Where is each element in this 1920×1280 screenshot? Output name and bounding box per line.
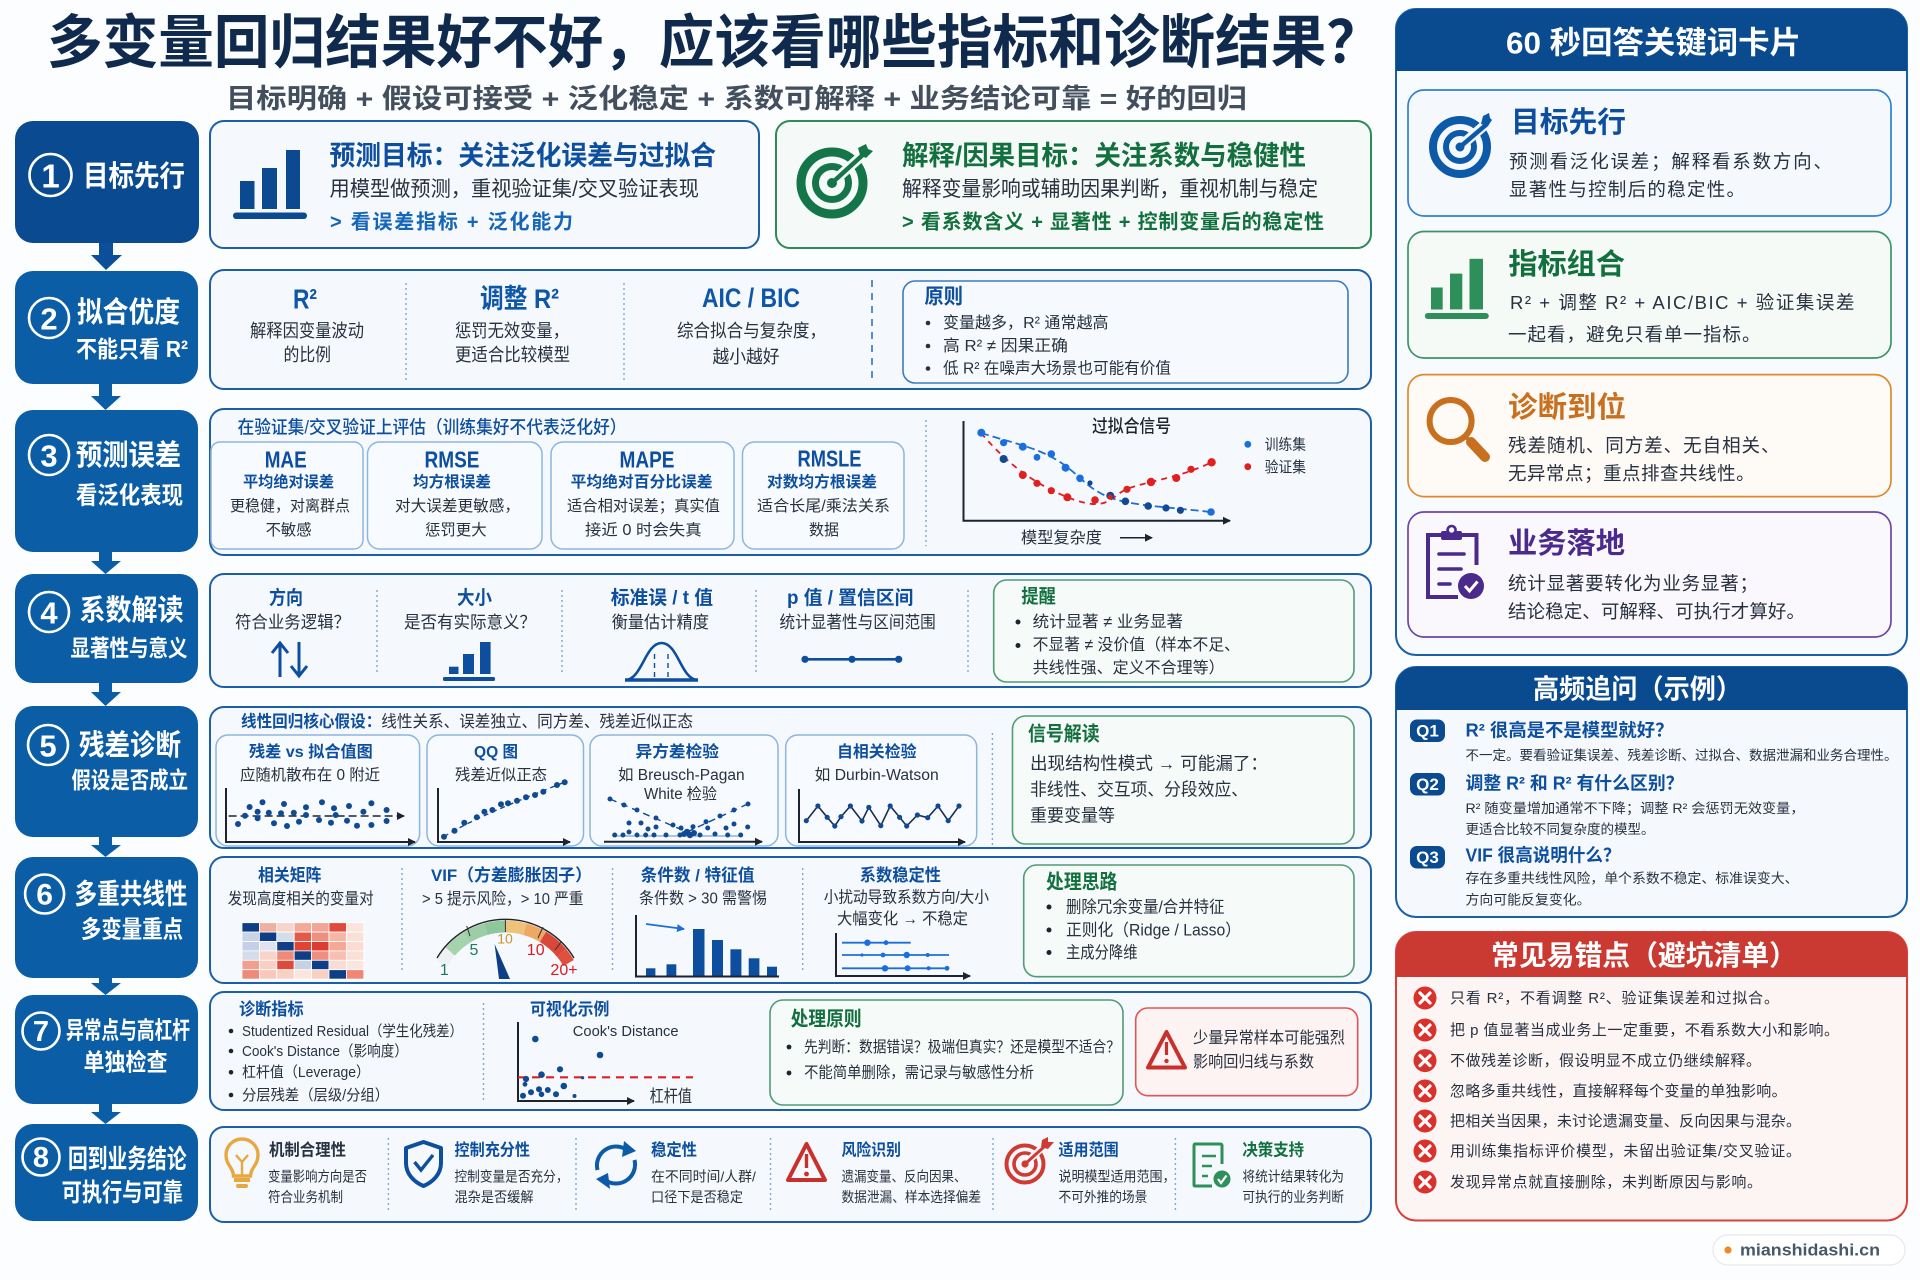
mistake 3: 不做残差诊断，假设明显不成立仍继续解释。 <box>1450 1052 1761 1070</box>
subtitle: 目标明确 + 假设可接受 + 泛化稳定 + 系数可解释 + 业务结论可靠 = 好的回归 <box>226 84 1247 114</box>
question 3 <box>1410 844 1798 908</box>
step 7 nav box: 7 <box>33 1016 49 1048</box>
chart: cook's distance <box>518 999 693 1106</box>
watermark: site name <box>1713 1235 1905 1265</box>
item: decision support: 将统计结果转化为 <box>1242 1168 1344 1184</box>
item: risk identification: 风险识别 <box>842 1140 901 1160</box>
item: direction: 方向 <box>269 586 303 609</box>
step 5 nav box: 残差诊断 <box>79 729 181 762</box>
chart: overfitting signal: 模型复杂度 <box>1021 529 1102 547</box>
panel header: 60 秒回答关键词卡片 <box>1506 26 1801 60</box>
mistake 2: 把 p 值显著当成业务上一定重要，不看系数大小和影响。 <box>1450 1022 1839 1039</box>
step 2 nav box: 2 <box>40 302 58 336</box>
panel header: 常见易错点（避坑清单） <box>1491 940 1797 971</box>
text: diagnostics <box>1508 391 1780 484</box>
card: autocorrelation test <box>786 735 977 846</box>
item: mechanism plausibility <box>226 1139 367 1205</box>
prediction goal text: 用模型做预测，重视验证集/交叉验证表现 <box>330 178 699 201</box>
item: mechanism plausibility: 符合业务机制 <box>268 1189 343 1205</box>
chart: overfitting signal: 过拟合信号 <box>1092 416 1171 436</box>
item: risk identification: 数据泄漏、样本选择偏差 <box>842 1189 981 1205</box>
card: MAE: 平均绝对误差 <box>243 472 334 491</box>
mistake 7: 发现异常点就直接删除，未判断原因与影响。 <box>1450 1174 1762 1191</box>
callout: reminder: 提醒 <box>1021 586 1056 608</box>
card: QQ plot: QQ 图 <box>474 744 518 761</box>
item: mechanism plausibility: 变量影响方向是否 <box>268 1168 367 1184</box>
mistake 5 <box>1414 1110 1801 1132</box>
item: applicability: 不可外推的场景 <box>1058 1189 1147 1205</box>
explanation goal text: 解释/因果目标：关注系数与稳健性 <box>902 141 1306 171</box>
item: standard error: 衡量估计精度 <box>612 613 709 632</box>
question 3: 存在多重共线性风险，单个系数不稳定、标准误变大、 <box>1466 870 1798 886</box>
question 2 <box>1410 773 1804 837</box>
metric: adjusted R squared: 调整 R² <box>480 284 559 314</box>
text: business landing: 结论稳定、可解释、可执行才算好。 <box>1508 601 1805 622</box>
callout: principles: 低 R² 在噪声大场景也可能有价值 <box>943 360 1171 378</box>
chart: overfitting signal: 训练集 <box>1265 436 1306 454</box>
mistake 3 <box>1414 1049 1761 1072</box>
callout: remedies: 主成分降维 <box>1066 943 1138 962</box>
step 7 nav box <box>15 995 198 1104</box>
step 3 nav box <box>15 410 198 552</box>
card: heteroscedasticity test: 如 Breusch-Pagan <box>618 766 745 784</box>
item: decision support: 可执行的业务判断 <box>1242 1189 1344 1205</box>
step 8 nav box <box>15 1124 198 1221</box>
chart: cook's distance: 杠杆值 <box>650 1087 692 1106</box>
chart: overfitting signal <box>964 416 1306 547</box>
panel: goodness of fit <box>210 270 1371 389</box>
explanation goal text: 解释变量影响或辅助因果判断，重视机制与稳定 <box>902 178 1318 201</box>
card: business landing <box>1408 512 1891 637</box>
card: RMSLE: 数据 <box>809 521 839 539</box>
arrow step 5 to 6 <box>91 837 121 857</box>
item: applicability: 适用范围 <box>1058 1140 1119 1160</box>
panel: residual diagnostics <box>210 707 1371 848</box>
card: metric combination <box>1408 232 1891 358</box>
list: diagnostic indicators: 杠杆值（Leverage） <box>242 1064 370 1081</box>
step 6 nav box: 6 <box>36 878 53 912</box>
callout: signal interpretation: 重要变量等 <box>1030 806 1115 826</box>
step 4 nav box: 4 <box>40 596 58 630</box>
item: control adequacy: 控制充分性 <box>454 1140 530 1160</box>
callout: remedies: 删除冗余变量/合并特征 <box>1066 898 1224 916</box>
step 4 nav box: 系数解读 <box>80 594 184 627</box>
panel: outliers and leverage <box>210 992 1371 1110</box>
step 1 nav box <box>15 121 199 243</box>
watermark: site name: mianshidashi.cn <box>1740 1240 1880 1260</box>
text: metric combination <box>1508 248 1854 345</box>
card: RMSE: 惩罚更大 <box>425 521 487 539</box>
callout: reminder <box>994 580 1354 682</box>
panel: follow-up questions <box>1396 667 1907 917</box>
panel: prediction goal <box>210 121 759 248</box>
callout: principles: 高 R² ≠ 因果正确 <box>943 337 1068 355</box>
arrow step 1 to 2 <box>91 243 122 270</box>
arrow step 7 to 8 <box>91 1104 121 1124</box>
explanation goal text <box>902 141 1324 234</box>
card: RMSLE <box>742 442 904 549</box>
step 2 nav box: 不能只看 R² <box>76 336 188 362</box>
callout: handling principles <box>770 1000 1123 1105</box>
icon: warning triangle <box>1148 1032 1185 1068</box>
step 7 nav box: 单独检查 <box>84 1048 168 1076</box>
arrow step 4 to 5 <box>91 683 121 706</box>
callout: signal interpretation: 非线性、交互项、分段效应、 <box>1030 780 1248 800</box>
panel: prediction error <box>210 409 1371 555</box>
panel header <box>1396 667 1907 710</box>
card: RMSE: RMSE <box>424 446 480 472</box>
item: direction: 符合业务逻辑？ <box>235 613 350 632</box>
item: VIF gauge: > 5 提示风险，> 10 严重 <box>422 890 584 908</box>
step 2 nav box: 拟合优度 <box>77 296 180 329</box>
question 1: 不一定。要看验证集误差、残差诊断、过拟合、数据泄漏和业务合理性。 <box>1466 748 1898 763</box>
item: standard error <box>611 587 713 680</box>
panel: explanation goal <box>776 121 1371 248</box>
callout: signal interpretation <box>1012 716 1354 844</box>
item: stability: 口径下是否稳定 <box>651 1189 743 1205</box>
item: VIF gauge: 10 <box>497 930 513 946</box>
step 1 nav box: 目标先行 <box>83 160 185 193</box>
question 2: 调整 R² 和 R² 有什么区别？ <box>1466 774 1684 794</box>
text: diagnostics: 诊断到位 <box>1508 391 1626 424</box>
arrow step 2 to 3 <box>91 384 121 410</box>
assumptions header: 线性回归核心假设：线性关系、误差独立、同方差、残差近似正态 <box>241 711 693 731</box>
item: VIF gauge <box>422 865 592 979</box>
arrow step 6 to 7 <box>91 978 121 995</box>
text: goal first: 目标先行 <box>1511 106 1626 139</box>
mistake 4: 忽略多重共线性，直接解释每个变量的单独影响。 <box>1450 1083 1787 1100</box>
warning text <box>1193 1029 1345 1071</box>
item: correlation matrix: 发现高度相关的变量对 <box>228 890 374 908</box>
prediction goal text <box>330 141 716 234</box>
text: goal first <box>1509 106 1832 200</box>
card: MAPE: 平均绝对百分比误差 <box>571 472 713 491</box>
card: QQ plot <box>427 735 584 846</box>
callout: handling principles: 不能简单删除，需记录与敏感性分析 <box>804 1064 1034 1082</box>
item: stability: 稳定性 <box>651 1140 697 1160</box>
mistake 6 <box>1414 1140 1801 1162</box>
warning text: 影响回归线与系数 <box>1193 1053 1314 1071</box>
prediction goal text: > 看误差指标 + 泛化能力 <box>330 210 573 234</box>
item: stability: 在不同时间/人群/ <box>651 1168 756 1184</box>
text: business landing <box>1508 527 1805 622</box>
item: coefficient stability: 大幅变化 → 不稳定 <box>837 910 968 928</box>
card: heteroscedasticity test: 异方差检验 <box>636 742 719 761</box>
card: RMSE <box>368 442 542 549</box>
item: risk identification: 遗漏变量、反向因果、 <box>842 1168 966 1184</box>
item: stability <box>596 1140 756 1205</box>
chart: cook's distance: Cook's Distance <box>573 1023 679 1040</box>
icon: bar chart <box>233 150 307 219</box>
card: MAE: 更稳健，对离群点 <box>230 497 350 515</box>
callout: signal interpretation: 出现结构性模式 → 可能漏了： <box>1030 754 1268 774</box>
step 6 nav box <box>15 857 198 978</box>
item: condition number chart <box>636 865 779 976</box>
metric: AIC BIC: AIC / BIC <box>702 283 800 313</box>
list: diagnostic indicators: 诊断指标 <box>239 999 304 1019</box>
callout: warning <box>1136 1008 1358 1096</box>
step 3 nav box: 预测误差 <box>76 439 181 472</box>
card: heteroscedasticity test: White 检验 <box>644 785 717 803</box>
step 4 nav box: 显著性与意义 <box>70 635 188 661</box>
item: correlation matrix: 相关矩阵 <box>258 866 321 885</box>
step 6 nav box: 多重共线性 <box>74 878 188 910</box>
step 8 nav box: 可执行与可靠 <box>62 1179 183 1207</box>
icon: green bars <box>1425 259 1489 319</box>
chart: cook's distance: 可视化示例 <box>530 999 609 1019</box>
callout: handling principles: 处理原则 <box>791 1008 862 1030</box>
callout: remedies: 处理思路 <box>1046 870 1117 894</box>
metric: R squared: 的比例 <box>284 345 331 365</box>
icon: clipboard <box>1428 526 1484 599</box>
item: risk identification <box>788 1140 981 1205</box>
explanation goal text: > 看系数含义 + 显著性 + 控制变量后的稳定性 <box>902 210 1324 234</box>
callout: reminder: 统计显著 ≠ 业务显著 <box>1033 613 1183 631</box>
card: autocorrelation test: 自相关检验 <box>837 742 916 761</box>
item: direction <box>235 586 350 677</box>
callout: remedies <box>1024 865 1354 977</box>
mistake 1 <box>1414 986 1779 1010</box>
card: heteroscedasticity test <box>590 735 778 846</box>
question 2: 更适合比较不同复杂度的模型。 <box>1466 821 1654 837</box>
arrow step 3 to 4 <box>91 552 121 574</box>
item: VIF gauge: 1 <box>440 962 449 979</box>
warning text: 少量异常样本可能强烈 <box>1193 1029 1345 1047</box>
metric: adjusted R squared <box>455 284 570 365</box>
text: business landing: 业务落地 <box>1508 527 1625 560</box>
panel header: 高频追问（示例） <box>1533 674 1742 704</box>
item: magnitude: 大小 <box>457 587 492 609</box>
item: control adequacy <box>406 1140 568 1205</box>
item: condition number chart: 条件数 > 30 需警惕 <box>639 890 767 908</box>
panel header <box>1396 932 1907 977</box>
item: applicability <box>1006 1137 1176 1205</box>
panel: 60 second keyword cards <box>1396 9 1907 655</box>
text: metric combination: R² + 调整 R² + AIC/BIC + 验证集误差 <box>1510 292 1854 313</box>
callout: signal interpretation: 信号解读 <box>1028 722 1100 746</box>
mistake 4 <box>1414 1080 1787 1102</box>
callout: principles: 原则 <box>924 286 963 308</box>
step 3 nav box: 看泛化表现 <box>76 482 183 510</box>
card: MAE: 不敏感 <box>266 521 312 539</box>
question 3: 方向可能反复变化。 <box>1466 892 1590 908</box>
item: magnitude: 是否有实际意义？ <box>404 613 536 632</box>
metric: R squared: 解释因变量波动 <box>250 321 364 341</box>
step 4 nav box <box>15 574 198 683</box>
card: MAPE <box>551 442 734 549</box>
title: 多变量回归结果好不好，应该看哪些指标和诊断结果？ <box>47 10 1382 76</box>
text: diagnostics: 残差随机、同方差、无自相关、 <box>1508 435 1780 456</box>
text: goal first: 预测看泛化误差；解释看系数方向、 <box>1509 151 1832 172</box>
card: MAPE: 接近 0 时会失真 <box>585 521 702 539</box>
callout: remedies: 正则化（Ridge / Lasso） <box>1066 920 1241 940</box>
item: VIF gauge: 10 <box>527 942 545 959</box>
metric: AIC BIC: 综合拟合与复杂度， <box>677 321 826 341</box>
card: RMSLE: RMSLE <box>798 446 862 472</box>
card: RMSLE: 适合长尾/乘法关系 <box>757 497 890 515</box>
text: goal first: 显著性与控制后的稳定性。 <box>1509 179 1745 200</box>
panel: coefficient interpretation <box>210 574 1371 687</box>
metric: AIC BIC <box>677 283 826 367</box>
question 2: Q2 <box>1416 775 1439 794</box>
icon: magnifier <box>1430 400 1485 457</box>
text: business landing: 统计显著要转化为业务显著； <box>1508 573 1758 594</box>
card: diagnostics <box>1408 375 1891 497</box>
list: diagnostic indicators: Cook's Distance（影响度） <box>242 1043 408 1060</box>
card: QQ plot: 残差近似正态 <box>455 766 547 784</box>
item: p value: p 值 / 置信区间 <box>787 587 913 609</box>
text: metric combination: 一起看，避免只看单一指标。 <box>1508 324 1760 345</box>
item: control adequacy: 混杂是否缓解 <box>454 1189 534 1205</box>
item: magnitude <box>404 587 536 681</box>
item: control adequacy: 控制变量是否充分， <box>454 1168 568 1184</box>
mistake 1: 只看 R²，不看调整 R²、验证集误差和过拟合。 <box>1450 990 1779 1007</box>
question 3: VIF 很高说明什么？ <box>1466 844 1620 866</box>
item: decision support: 决策支持 <box>1242 1140 1304 1160</box>
card: RMSE: 对大误差更敏感， <box>395 497 520 515</box>
mistake 5: 把相关当因果，未讨论遗漏变量、反向因果与混杂。 <box>1450 1113 1801 1130</box>
prediction goal text: 预测目标：关注泛化误差与过拟合 <box>330 141 716 171</box>
card: goal first <box>1408 90 1891 216</box>
panel: multicollinearity <box>210 857 1371 983</box>
card: MAE: MAE <box>265 446 307 472</box>
mistake 2 <box>1414 1018 1839 1042</box>
step 3 nav box: 3 <box>40 438 58 474</box>
list: diagnostic indicators: 分层残差（层级/分组） <box>242 1087 389 1104</box>
metric: R squared: R² <box>293 284 317 314</box>
card: residual vs fitted <box>216 735 420 846</box>
item: VIF gauge: 20+ <box>550 962 578 979</box>
metric: AIC BIC: 越小越好 <box>712 347 780 367</box>
step 5 nav box <box>15 706 198 837</box>
question 1: R² 很高是不是模型就好？ <box>1466 720 1674 740</box>
step 8 nav box: 回到业务结论 <box>68 1144 187 1174</box>
card: MAPE: MAPE <box>620 446 674 472</box>
metric: R squared <box>250 284 364 365</box>
icon: blue target <box>1433 113 1492 174</box>
item: mechanism plausibility: 机制合理性 <box>269 1140 346 1160</box>
step 5 nav box: 假设是否成立 <box>72 767 188 793</box>
list: diagnostic indicators <box>229 999 463 1104</box>
panel header text: 在验证集/交叉验证上评估（训练集好不代表泛化好） <box>238 418 626 438</box>
card: MAE <box>211 442 363 549</box>
card: residual vs fitted: 残差 vs 拟合值图 <box>249 742 373 761</box>
question 2: R² 随变量增加通常不下降；调整 R² 会惩罚无效变量， <box>1466 801 1804 817</box>
card: MAPE: 适合相对误差；真实值 <box>567 497 720 515</box>
item: VIF gauge: VIF（方差膨胀因子） <box>431 865 592 885</box>
metric: adjusted R squared: 更适合比较模型 <box>455 345 570 365</box>
question 3: Q3 <box>1416 848 1439 867</box>
item: condition number chart: 条件数 / 特征值 <box>641 865 754 885</box>
card: RMSE: 均方根误差 <box>413 472 491 491</box>
text: metric combination: 指标组合 <box>1508 248 1625 281</box>
card: residual vs fitted: 应随机散布在 0 附近 <box>240 765 380 784</box>
item: VIF gauge: 5 <box>470 942 479 959</box>
item: coefficient stability: 系数稳定性 <box>860 865 941 885</box>
chart: overfitting signal: 验证集 <box>1265 459 1306 476</box>
callout: reminder: 不显著 ≠ 没价值（样本不足、 <box>1033 636 1240 654</box>
callout: principles <box>903 281 1348 383</box>
text: diagnostics: 无异常点；重点排查共线性。 <box>1508 463 1755 484</box>
mistake 6: 用训练集指标评价模型，未留出验证集/交叉验证。 <box>1450 1142 1801 1160</box>
item: standard error: 标准误 / t 值 <box>611 587 713 609</box>
question 1 <box>1410 720 1898 763</box>
callout: handling principles: 先判断：数据错误？极端但真实？还是模型不适合？ <box>804 1038 1120 1056</box>
item: p value: 统计显著性与区间范围 <box>780 613 936 632</box>
step 2 nav box <box>15 271 198 384</box>
item: coefficient stability <box>824 865 989 976</box>
metric: adjusted R squared: 惩罚无效变量， <box>455 321 569 341</box>
step 6 nav box: 多变量重点 <box>81 916 183 944</box>
panel: common mistakes <box>1396 932 1907 1220</box>
icon: green target <box>801 144 873 214</box>
card: autocorrelation test: 如 Durbin-Watson <box>815 766 939 784</box>
question 1: Q1 <box>1416 722 1439 740</box>
mistake 7 <box>1414 1170 1762 1194</box>
item: coefficient stability: 小扰动导致系数方向/大小 <box>824 888 989 906</box>
step 1 nav box: 1 <box>41 158 60 194</box>
step 5 nav box: 5 <box>39 728 57 764</box>
list: diagnostic indicators: Studentized Residual（学生化残差） <box>242 1023 463 1040</box>
item: applicability: 说明模型适用范围， <box>1058 1168 1176 1184</box>
card: RMSLE: 对数均方根误差 <box>767 472 877 491</box>
step 8 nav box: 8 <box>33 1142 49 1174</box>
item: correlation matrix <box>228 866 374 979</box>
item: decision support <box>1194 1140 1344 1205</box>
callout: reminder: 共线性强、定义不合理等） <box>1033 659 1225 677</box>
step 7 nav box: 异常点与高杠杆 <box>66 1018 190 1044</box>
panel: back to business <box>210 1127 1371 1222</box>
panel header <box>1396 9 1907 71</box>
callout: principles: 变量越多，R² 通常越高 <box>943 314 1108 332</box>
item: p value <box>780 587 936 663</box>
